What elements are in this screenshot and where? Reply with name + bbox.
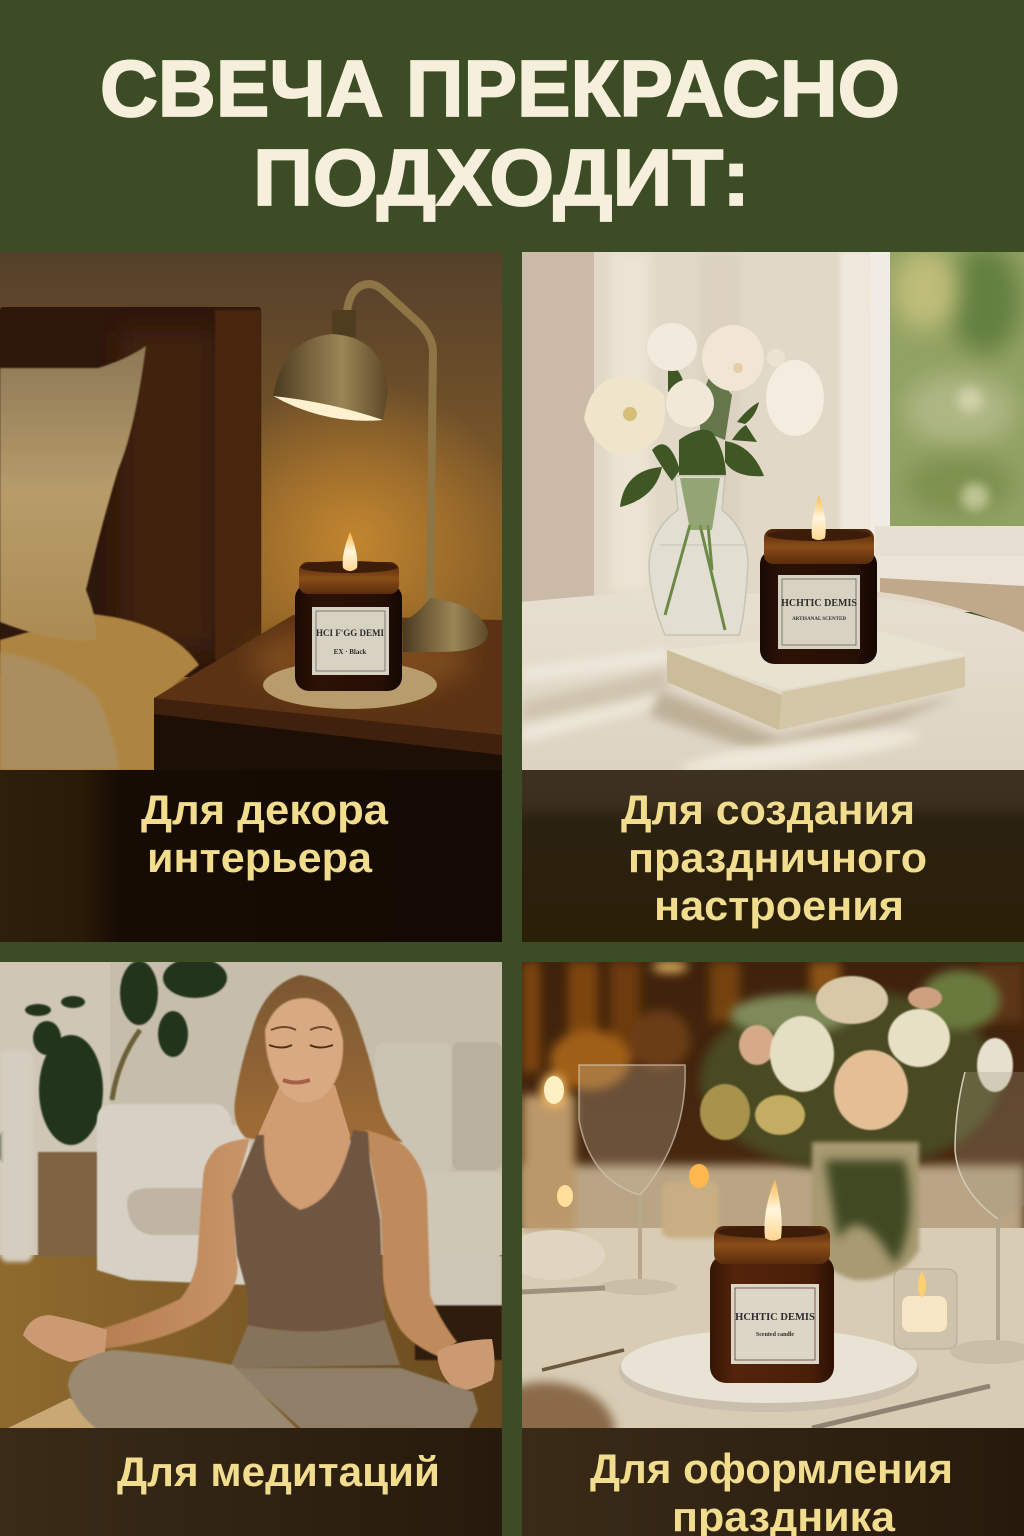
table: [522, 592, 1024, 781]
caption text: интерьера: [147, 834, 373, 881]
candle jar: HCI F'GG DEMI: [316, 628, 384, 638]
photo: festive table: [522, 962, 1024, 1428]
leaves: [620, 360, 764, 507]
lamp shade: [273, 310, 388, 421]
blurred background bars: [522, 961, 1024, 1090]
bed: [0, 614, 199, 770]
lamp arm: [347, 284, 433, 604]
knives: [522, 1288, 990, 1428]
face: [265, 998, 343, 1102]
candle jar: [760, 495, 877, 664]
main plate: [619, 1329, 919, 1412]
photo: woman meditating: [0, 958, 502, 1432]
small candle: [894, 1269, 957, 1349]
left curtain: [0, 1050, 33, 1262]
caption bar: [0, 770, 502, 942]
title: ПОДХОДИТ:: [253, 133, 750, 222]
pot: [38, 1152, 98, 1257]
candle jar: [710, 1179, 834, 1383]
sofa: [414, 1042, 502, 1361]
photo: bedroom with lamp: [0, 252, 525, 770]
coaster: [263, 661, 437, 709]
candle jar: ARTISANAL SCENTED: [792, 617, 846, 622]
lamp base: [403, 598, 488, 652]
left plate: [505, 1230, 605, 1280]
left arm: [100, 1138, 250, 1349]
hands: [23, 1315, 494, 1390]
blurred candles: [522, 1073, 719, 1238]
caption text: [141, 786, 389, 881]
panel: festive mood: [522, 245, 1024, 942]
waistband and legs: [68, 1320, 478, 1432]
table: [475, 1165, 1024, 1482]
armchair: [97, 1104, 250, 1285]
window: [870, 245, 1024, 632]
candle jar: Scented candle: [756, 1332, 794, 1338]
candle jar: HCHTIC DEMIS: [781, 598, 857, 609]
right arm: [365, 1130, 457, 1356]
caption text: праздничного: [628, 834, 927, 881]
caption bar: [0, 1428, 502, 1536]
plant: [0, 958, 227, 1164]
eyes and mouth: [269, 1027, 333, 1082]
hair: [234, 975, 403, 1142]
caption text: Для оформления: [590, 1445, 953, 1492]
panel: holiday decoration: [475, 961, 1024, 1536]
flower vase: [812, 1142, 919, 1280]
nightstand: [154, 615, 502, 770]
caption text: настроения: [654, 882, 904, 929]
caption text: Для медитаций: [117, 1448, 440, 1495]
caption text: [621, 786, 927, 929]
panel: interior decor: [0, 252, 525, 942]
headboard: [0, 307, 261, 677]
pillow: [0, 346, 146, 641]
bouquet: [700, 970, 1013, 1170]
panel: meditation: [0, 958, 502, 1536]
flowers: [584, 323, 824, 455]
floor mat: [8, 1398, 96, 1428]
candle jar: EX · Black: [334, 648, 366, 656]
caption text: [590, 1445, 953, 1536]
tank top: [232, 1130, 385, 1332]
caption text: Для создания: [621, 786, 915, 833]
title: СВЕЧА ПРЕКРАСНО: [100, 44, 900, 133]
title: [100, 44, 900, 222]
book: [667, 650, 965, 730]
caption bar: [522, 1428, 1024, 1536]
neck and chest: [258, 1085, 350, 1214]
photo: flowers and candle on book: [522, 245, 1024, 781]
right wine glass: [950, 1072, 1024, 1364]
left wine glass: [579, 1065, 685, 1295]
candle jar: [295, 532, 402, 691]
caption bar: [522, 770, 1024, 942]
candle jar: HCHTIC DEMIS: [735, 1312, 815, 1323]
caption text: Для декора: [141, 786, 389, 833]
vase: [649, 476, 748, 635]
